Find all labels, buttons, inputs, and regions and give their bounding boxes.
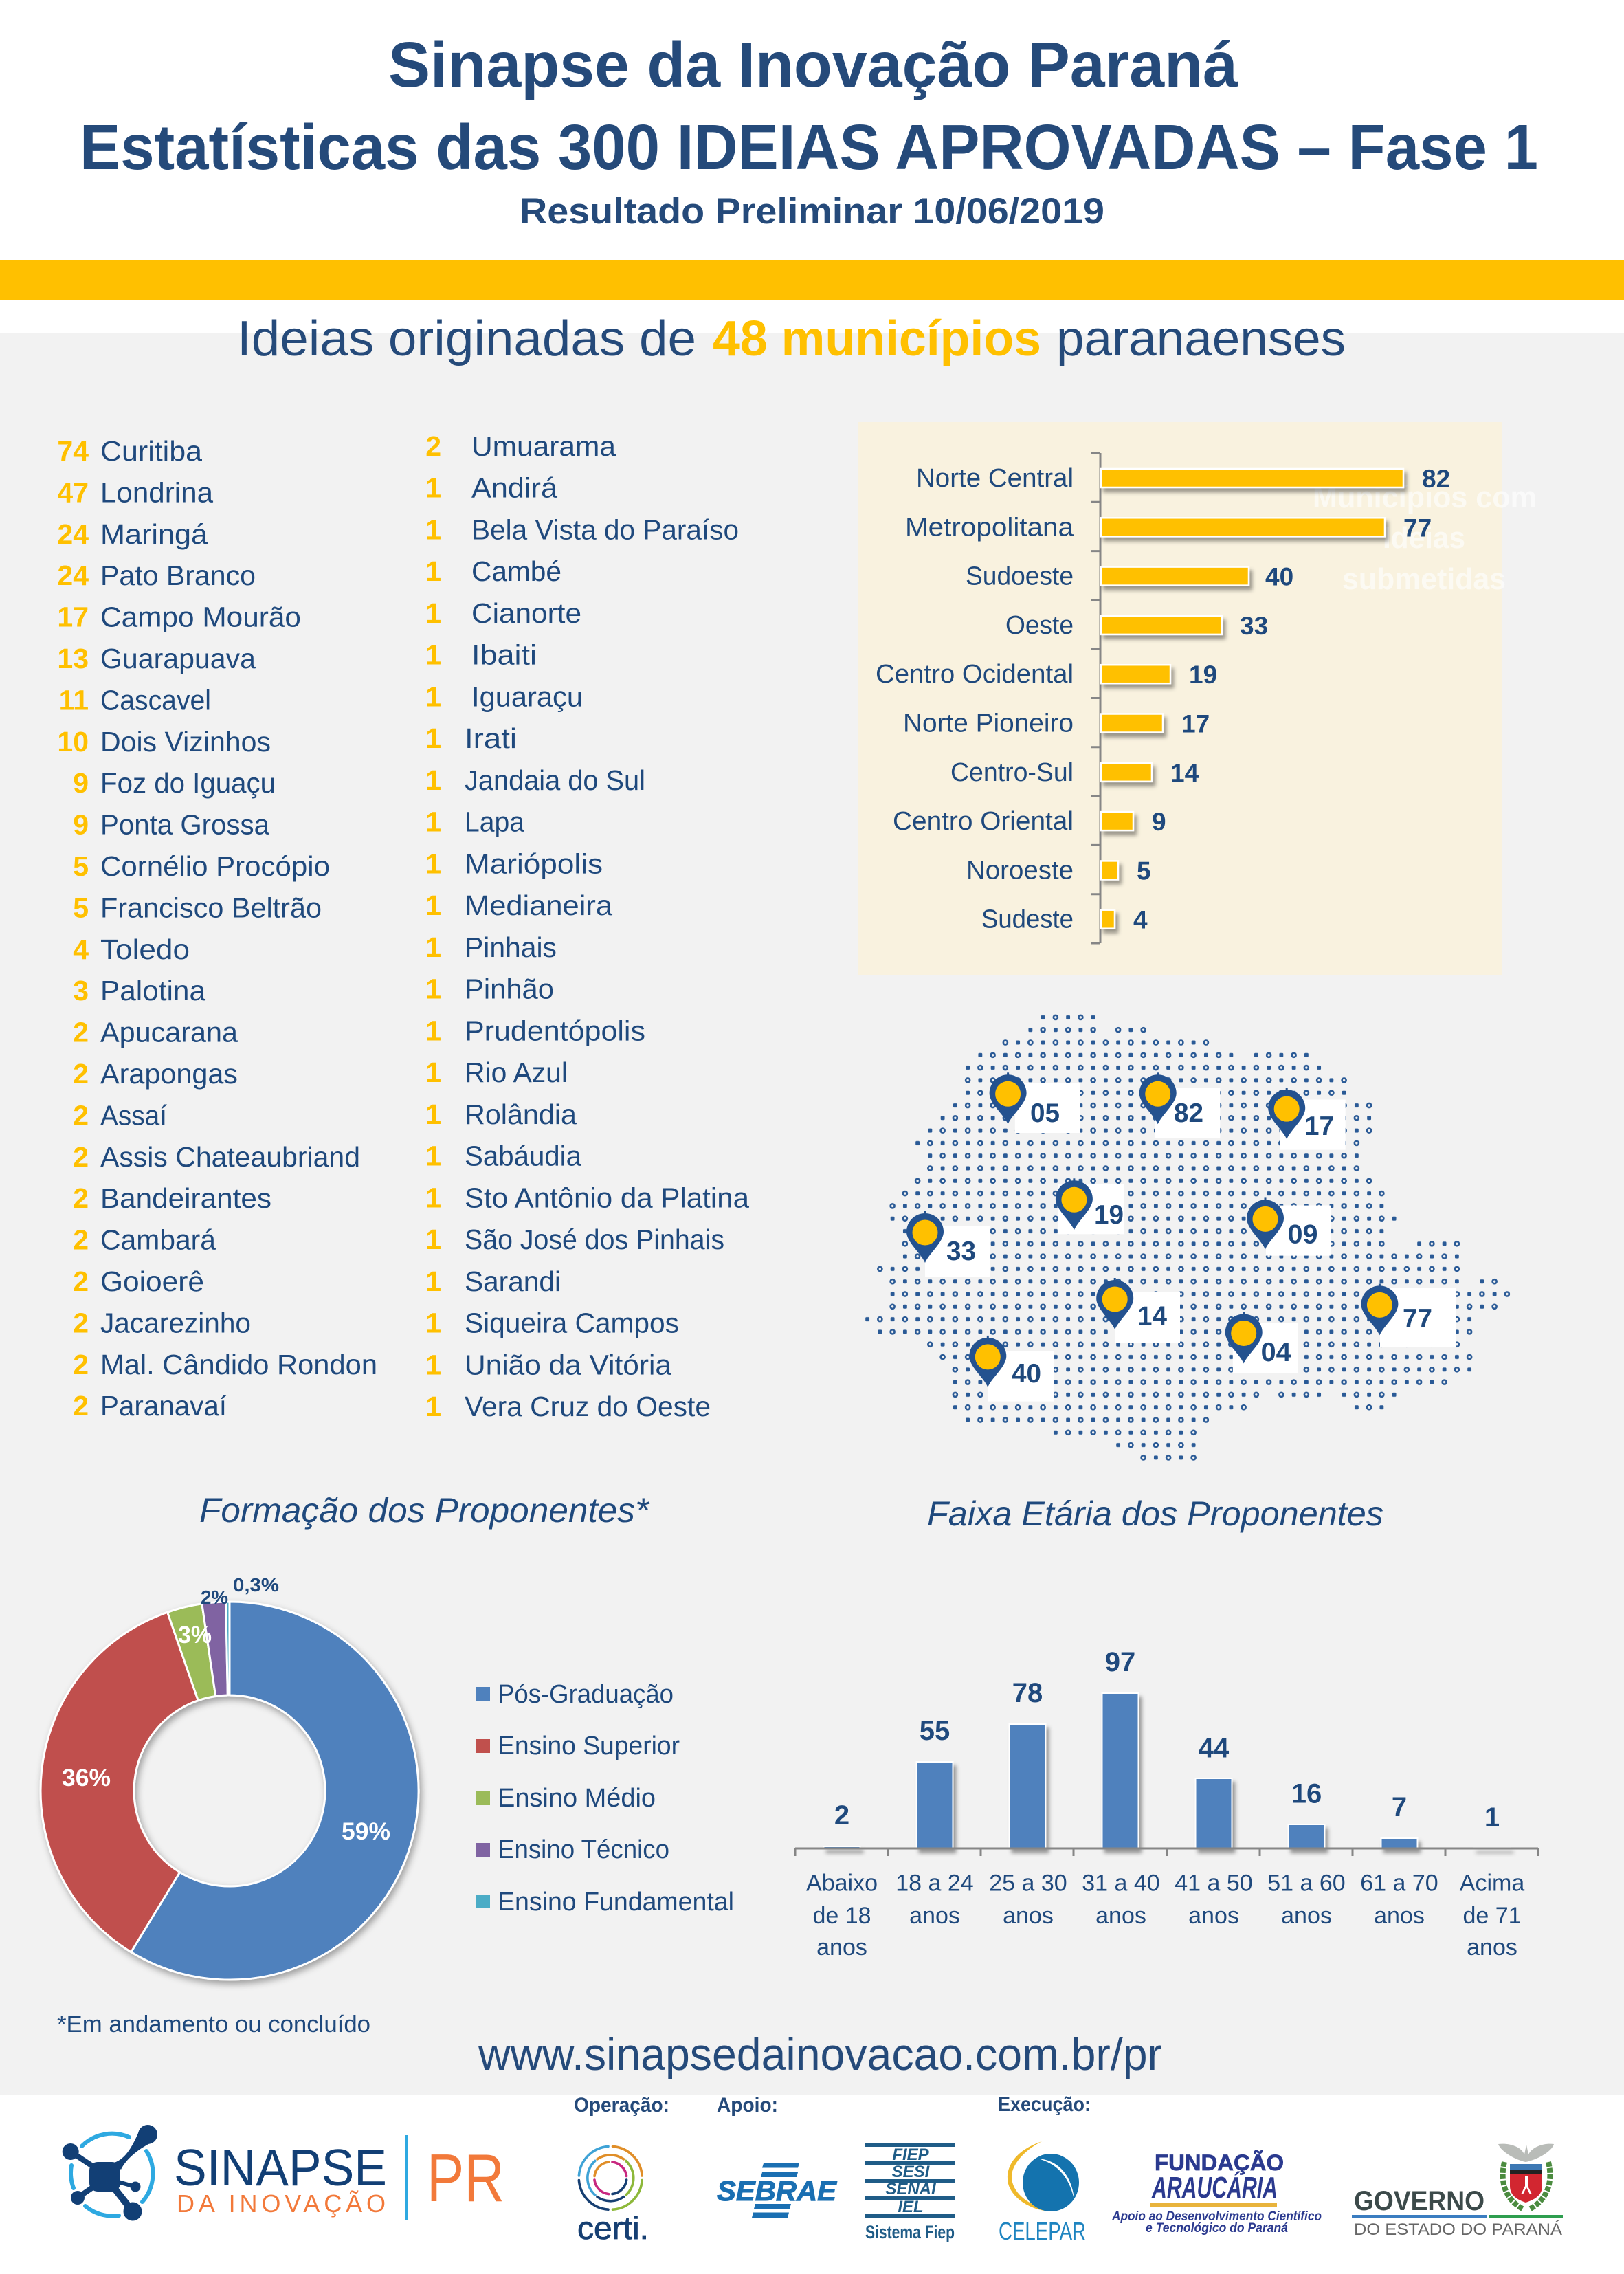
region values: 77 xyxy=(1403,514,1432,542)
age labels: anos xyxy=(1467,1934,1517,1961)
age values: 44 xyxy=(1199,1734,1230,1764)
municipality list column 2: Andirá xyxy=(471,472,557,504)
municipality list column 1: Cambará xyxy=(100,1224,216,1256)
heading: municipalities: 48 municípios xyxy=(713,311,1041,366)
age values: 55 xyxy=(920,1716,950,1746)
municipality list column 2: 1 xyxy=(425,1266,441,1297)
municipality list column 2: Siqueira Campos xyxy=(465,1307,679,1339)
map values: 14 xyxy=(1137,1302,1167,1332)
logo: Sistema Fiep: SENAI xyxy=(885,2180,937,2198)
age values: 7 xyxy=(1392,1792,1407,1822)
municipality list column 2: 1 xyxy=(425,472,441,504)
municipality list column 2: Rolândia xyxy=(465,1099,577,1130)
age labels: 41 a 50 xyxy=(1175,1870,1253,1896)
municipality list column 2: 1 xyxy=(425,1391,441,1422)
age labels: anos xyxy=(909,1903,960,1929)
age labels: anos xyxy=(1281,1903,1332,1929)
municipality list column 1: 17 xyxy=(57,601,89,633)
municipality list column 1: Assaí xyxy=(100,1099,168,1131)
municipality list column 1: 5 xyxy=(73,850,89,882)
municipality list column 2: Pinhais xyxy=(465,931,557,963)
municipality list column 1: Paranavaí xyxy=(100,1390,227,1422)
region labels: Sudoeste xyxy=(966,562,1074,591)
municipality list column 2: 1 xyxy=(425,722,441,754)
municipality list column 1: 3 xyxy=(73,975,89,1006)
legend: education: Pós-Graduação xyxy=(498,1680,674,1709)
municipality list column 2: 1 xyxy=(425,1182,441,1213)
municipality list column 2: 1 xyxy=(425,597,441,629)
map values: 09 xyxy=(1288,1219,1318,1250)
logo: Governo do Estado do Paraná xyxy=(1352,2144,1563,2239)
region labels xyxy=(876,464,1074,934)
municipality list column 2: 1 xyxy=(425,1099,441,1130)
municipality list column 2: 1 xyxy=(425,1140,441,1172)
map pins xyxy=(906,1072,1398,1387)
logo: Fundação Araucária: FUNDAÇÃO xyxy=(1155,2150,1284,2175)
municipality list column 1: 2 xyxy=(73,1141,89,1173)
municipality list column 2: 1 xyxy=(425,973,441,1005)
municipality list column 1: Assis Chateaubriand xyxy=(100,1141,360,1173)
municipality list column 2: Rio Azul xyxy=(465,1057,568,1088)
municipality list column 1: 13 xyxy=(57,643,89,674)
donut values: 36% xyxy=(62,1765,111,1791)
municipality list column 2: Prudentópolis xyxy=(465,1015,645,1046)
faded caption: submetidas xyxy=(1342,562,1506,596)
municipality list column 1: Toledo xyxy=(100,934,190,965)
municipality list column 2: Sarandi xyxy=(465,1266,561,1297)
logo: Fundação Araucária: Apoio ao Desenvolvimento Científico xyxy=(1111,2209,1322,2224)
bar chart: age range xyxy=(795,1647,1538,1961)
faded caption: Municípios com xyxy=(1313,481,1537,514)
logo: Sinapse da Inovação PR: DA INOVAÇÃO xyxy=(177,2189,386,2218)
logo: Fundação Araucária xyxy=(1111,2150,1322,2236)
municipality list column 1: 9 xyxy=(73,767,89,799)
age values xyxy=(834,1647,1500,1833)
municipality list column 2: Sabáudia xyxy=(465,1140,581,1172)
map values: 04 xyxy=(1261,1338,1291,1367)
region values: 19 xyxy=(1189,661,1217,689)
municipality list column 1: Jacarezinho xyxy=(100,1307,251,1338)
heading: age range: Faixa Etária dos Proponentes xyxy=(927,1494,1383,1533)
municipality list column 1: 2 xyxy=(73,1099,89,1131)
municipality list column 2: Jandaia do Sul xyxy=(465,764,645,796)
map values: 77 xyxy=(1403,1304,1432,1334)
municipality list column 2: Mariópolis xyxy=(465,848,603,879)
age labels: de 18 xyxy=(812,1903,871,1929)
footer captions: Execução: xyxy=(998,2093,1091,2116)
municipality list column 2: 1 xyxy=(425,848,441,879)
age labels: 25 a 30 xyxy=(989,1870,1067,1896)
age labels: de 71 xyxy=(1462,1903,1522,1929)
logo: Sistema Fiep: FIEP xyxy=(892,2145,930,2164)
municipality list column 2 xyxy=(425,430,749,1422)
age labels: anos xyxy=(1003,1903,1054,1929)
municipality list column 1: 24 xyxy=(57,560,89,591)
municipality list column 1: 4 xyxy=(73,934,89,965)
age labels: 51 a 60 xyxy=(1267,1870,1346,1896)
region labels: Centro Oriental xyxy=(893,807,1074,836)
municipality list column 2: 1 xyxy=(425,639,441,671)
logo: SEBRAE: SEBRAE xyxy=(717,2175,838,2207)
legend: education: Ensino Superior xyxy=(498,1732,680,1760)
logo: Fundação Araucária: ARAUCÁRIA xyxy=(1151,2170,1278,2205)
municipality list column 1: Mal. Cândido Rondon xyxy=(100,1349,377,1380)
municipality list column 1: Ponta Grossa xyxy=(100,809,269,841)
municipality list column 2: 1 xyxy=(425,1307,441,1339)
heading: municipalities: paranaenses xyxy=(1056,311,1346,366)
municipality list column 1: 2 xyxy=(73,1017,89,1048)
age labels: anos xyxy=(816,1934,867,1961)
heading: municipalities xyxy=(237,311,1346,366)
region values: 33 xyxy=(1240,612,1268,640)
region labels: Norte Pioneiro xyxy=(903,709,1074,738)
donut values xyxy=(62,1574,390,1845)
dotted state shape xyxy=(861,1011,1513,1464)
municipality list column 2: São José dos Pinhais xyxy=(465,1224,724,1255)
axis xyxy=(1091,453,1100,943)
municipality list column 2: Lapa xyxy=(465,806,524,838)
icon: neural node xyxy=(63,2125,157,2220)
age values: 2 xyxy=(834,1800,849,1831)
municipality list column 1: 2 xyxy=(73,1266,89,1297)
map values: 19 xyxy=(1094,1200,1124,1230)
municipality list column 1: 11 xyxy=(59,684,89,716)
municipality list column 1: Bandeirantes xyxy=(100,1182,271,1214)
municipality list column 1: 2 xyxy=(73,1307,89,1338)
municipality list column 2: 1 xyxy=(425,1224,441,1255)
region values: 82 xyxy=(1422,465,1450,493)
age bars xyxy=(823,1693,1511,1848)
municipality list column 2: Umuarama xyxy=(471,430,616,462)
region labels: Oeste xyxy=(1005,611,1074,640)
logo: Sinapse da Inovação PR xyxy=(63,2125,504,2220)
yellow band xyxy=(0,260,1624,300)
logo: Sistema Fiep: IEL xyxy=(898,2198,924,2216)
region values: 17 xyxy=(1181,709,1210,738)
heading: education: Formação dos Proponentes* xyxy=(199,1491,650,1530)
municipality list column 2: Bela Vista do Paraíso xyxy=(471,514,739,546)
title line 2: Estatísticas das 300 IDEIAS APROVADAS – Fase 1 xyxy=(80,111,1538,183)
donut chart: education xyxy=(41,1574,419,1980)
logo: Governo do Estado do Paraná: GOVERNO xyxy=(1354,2186,1484,2216)
municipality list column 1: 2 xyxy=(73,1390,89,1422)
municipality list column 1: Palotina xyxy=(100,975,205,1006)
footnote: *Em andamento ou concluído xyxy=(57,2011,370,2038)
municipality list column 2: Medianeira xyxy=(465,890,612,921)
map values: 40 xyxy=(1012,1359,1041,1389)
region labels: Sudeste xyxy=(981,905,1074,934)
age labels: anos xyxy=(1188,1903,1239,1929)
municipality list column 1: Campo Mourão xyxy=(100,601,301,633)
age values: 78 xyxy=(1012,1678,1043,1708)
panel background xyxy=(858,422,1502,975)
age labels: anos xyxy=(1374,1903,1425,1929)
subtitle: Resultado Preliminar 10/06/2019 xyxy=(520,191,1104,232)
municipality list column 2: 1 xyxy=(425,681,441,712)
age values: 97 xyxy=(1105,1647,1135,1677)
logo: Sistema Fiep xyxy=(865,2143,955,2242)
municipality list column 1 xyxy=(57,435,377,1422)
heading: municipalities: Ideias originadas de xyxy=(237,311,696,366)
municipality list column 1: Foz do Iguaçu xyxy=(100,767,276,799)
municipality list column 1: 5 xyxy=(73,892,89,923)
logo: SEBRAE xyxy=(717,2163,838,2218)
municipality list column 1: Cornélio Procópio xyxy=(100,850,330,882)
municipality list column 2: 1 xyxy=(425,1057,441,1088)
legend: education xyxy=(476,1680,734,1917)
age labels: 18 a 24 xyxy=(896,1870,974,1896)
municipality list column 2: Cambé xyxy=(471,555,561,587)
municipality list column 2: 1 xyxy=(425,806,441,838)
panel: region bar chart xyxy=(858,422,1537,975)
municipality list column 2: 1 xyxy=(425,931,441,963)
coat of arms xyxy=(1498,2144,1554,2209)
municipality list column 1: Maringá xyxy=(100,518,208,550)
age labels xyxy=(806,1870,1524,1961)
region values: 14 xyxy=(1170,759,1199,787)
donut values: 59% xyxy=(342,1818,390,1845)
region labels: Metropolitana xyxy=(905,513,1074,542)
municipality list column 1: 74 xyxy=(57,435,89,467)
municipality list column 1: 2 xyxy=(73,1224,89,1256)
municipality list column 1: 47 xyxy=(57,476,89,508)
municipality list column 1: 2 xyxy=(73,1058,89,1090)
logo: CELEPAR xyxy=(999,2141,1086,2245)
municipality list column 1: Curitiba xyxy=(100,435,202,467)
municipality list column 1: Arapongas xyxy=(100,1058,238,1090)
map of Paraná xyxy=(861,1011,1513,1464)
age labels: Abaixo xyxy=(806,1870,878,1896)
municipality list column 2: Irati xyxy=(465,722,517,754)
municipality list column 2: Pinhão xyxy=(465,973,554,1005)
logo: Fundação Araucária: e Tecnológico do Paraná xyxy=(1146,2221,1288,2236)
map values: 33 xyxy=(946,1237,976,1266)
legend: education: Ensino Técnico xyxy=(498,1835,669,1864)
municipality list column 2: Cianorte xyxy=(471,597,581,629)
municipality list column 2: 2 xyxy=(425,430,441,462)
municipality list column 2: Sto Antônio da Platina xyxy=(465,1182,749,1213)
logo: CELEPAR: CELEPAR xyxy=(999,2217,1086,2245)
municipality list column 1: Pato Branco xyxy=(100,560,256,591)
bars xyxy=(1101,469,1403,929)
age labels: Acima xyxy=(1460,1870,1524,1896)
municipality list column 2: 1 xyxy=(425,1349,441,1380)
municipality list column 1: Apucarana xyxy=(100,1017,238,1048)
region labels: Centro Ocidental xyxy=(876,660,1074,689)
map values: 05 xyxy=(1030,1099,1060,1128)
municipality list column 2: 1 xyxy=(425,555,441,587)
age values: 1 xyxy=(1484,1802,1500,1833)
label backgrounds xyxy=(925,1083,1456,1402)
logo: Sistema Fiep: SESI xyxy=(892,2163,931,2181)
legend: education: Ensino Fundamental xyxy=(498,1888,734,1917)
municipality list column 1: 2 xyxy=(73,1349,89,1380)
logo: Governo do Estado do Paraná: DO ESTADO DO PARANÁ xyxy=(1354,2220,1562,2239)
municipality list column 2: Ibaiti xyxy=(471,639,537,671)
map values: 82 xyxy=(1174,1099,1203,1128)
age labels: 31 a 40 xyxy=(1082,1870,1160,1896)
donut values: 3% xyxy=(178,1622,212,1648)
municipality list column 1: Guarapuava xyxy=(100,643,256,674)
donut slices xyxy=(41,1602,419,1980)
age labels: anos xyxy=(1095,1903,1146,1929)
municipality list column 1: Cascavel xyxy=(100,684,211,716)
region values: 5 xyxy=(1137,857,1151,885)
legend: education: Ensino Médio xyxy=(498,1784,656,1813)
region labels: Noroeste xyxy=(966,856,1074,885)
axis xyxy=(795,1848,1538,1856)
municipality list column 2: 1 xyxy=(425,764,441,796)
footer captions: Apoio: xyxy=(717,2094,778,2117)
municipality list column 1: 24 xyxy=(57,518,89,550)
faded caption: Ideias xyxy=(1383,521,1465,555)
municipality list column 2: 1 xyxy=(425,514,441,546)
municipality list column 2: Iguaraçu xyxy=(471,681,583,712)
logo: Sinapse da Inovação PR: PR xyxy=(427,2140,504,2216)
municipality list column 1: 2 xyxy=(73,1182,89,1214)
municipality list column 2: 1 xyxy=(425,1015,441,1046)
donut values: 2% xyxy=(201,1587,228,1608)
municipality list column 2: Vera Cruz do Oeste xyxy=(465,1391,711,1422)
municipality list column 1: Francisco Beltrão xyxy=(100,892,322,923)
logo: Sistema Fiep: Sistema Fiep xyxy=(865,2222,955,2242)
municipality list column 1: Londrina xyxy=(100,476,213,508)
title block xyxy=(80,29,1538,232)
region values: 40 xyxy=(1265,563,1293,591)
title line 1: Sinapse da Inovação Paraná xyxy=(388,29,1238,100)
region values xyxy=(1133,465,1450,934)
footer captions: Operação: xyxy=(574,2094,669,2117)
faded caption xyxy=(1313,481,1537,596)
municipality list column 1: Dois Vizinhos xyxy=(100,726,271,758)
map values: 17 xyxy=(1304,1112,1334,1141)
region labels: Norte Central xyxy=(916,464,1074,493)
logo: CERTI xyxy=(577,2146,649,2246)
logo: CERTI: certi. xyxy=(577,2210,649,2246)
region values: 9 xyxy=(1152,808,1166,836)
municipality list column 2: União da Vitória xyxy=(465,1349,671,1380)
website url: www.sinapsedainovacao.com.br/pr xyxy=(478,2029,1162,2079)
region values: 4 xyxy=(1133,906,1148,934)
donut values: 0,3% xyxy=(233,1574,279,1596)
age labels: 61 a 70 xyxy=(1360,1870,1438,1896)
municipality list column 1: 9 xyxy=(73,809,89,841)
page background xyxy=(0,333,1624,2095)
footer captions xyxy=(574,2093,1091,2117)
region labels: Centro-Sul xyxy=(950,758,1074,787)
municipality list column 1: Goioerê xyxy=(100,1266,204,1297)
wordmark: SINAPSE xyxy=(174,2139,387,2196)
age values: 16 xyxy=(1291,1779,1322,1809)
municipality list column 1: 10 xyxy=(57,726,89,758)
map values xyxy=(946,1099,1432,1389)
municipality list column 2: 1 xyxy=(425,890,441,921)
